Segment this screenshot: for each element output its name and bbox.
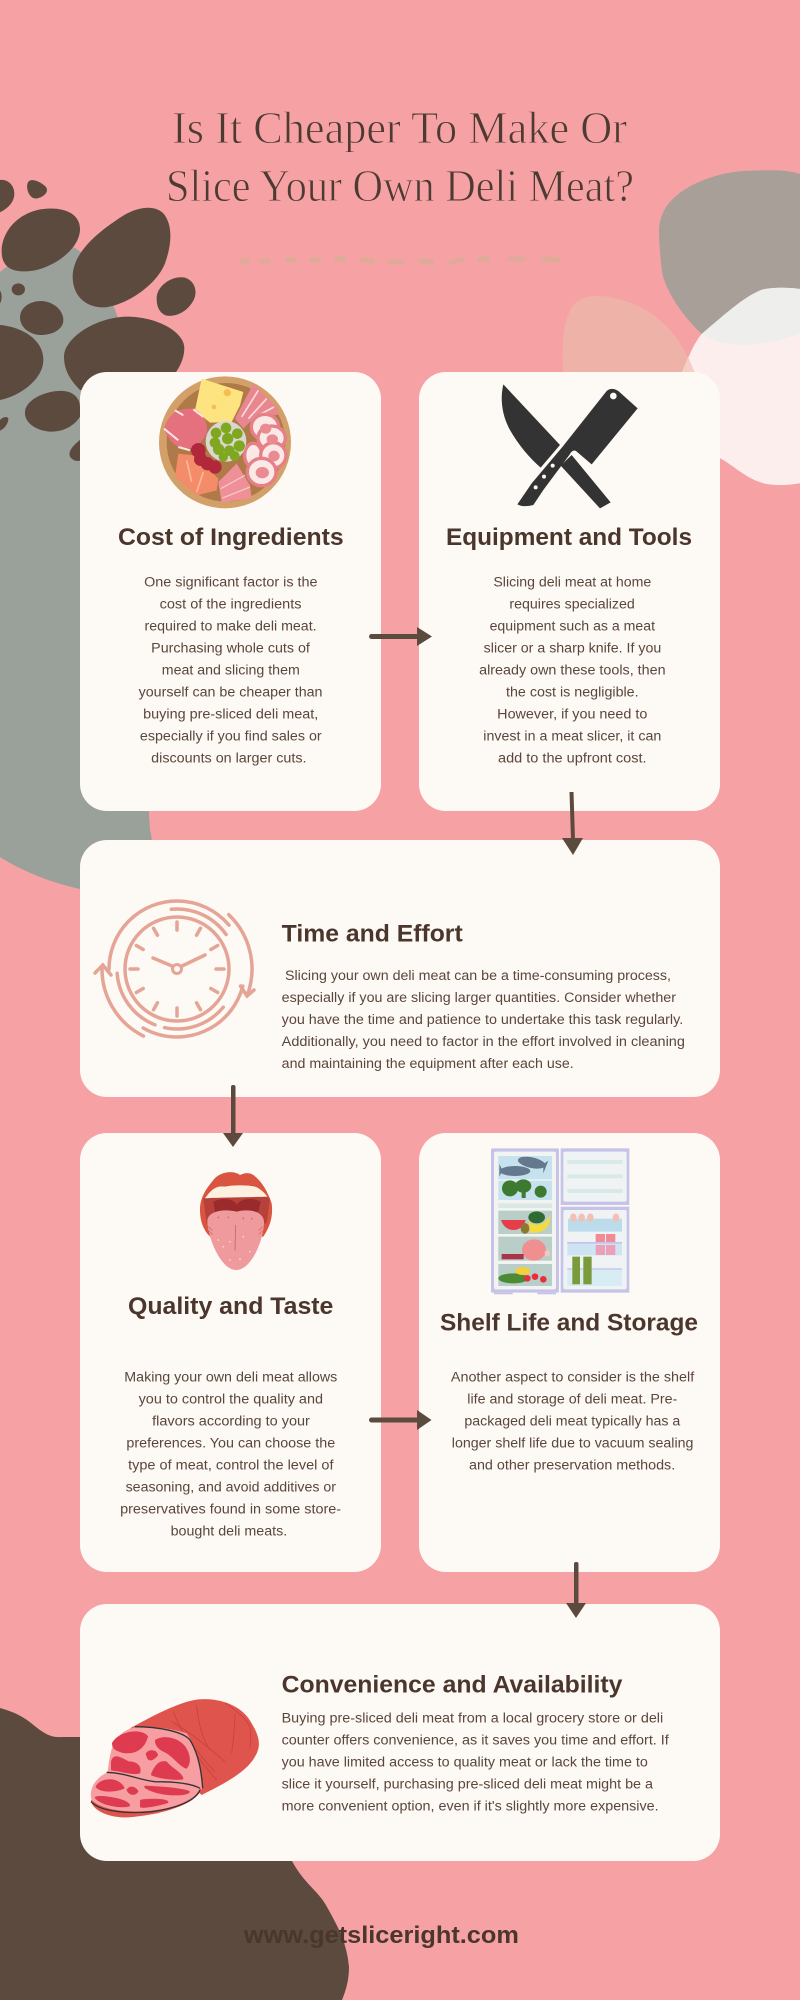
body text: Additionally, you need to factor in the effort involved in cleaning (282, 1034, 685, 1049)
heading: Convenience and Availability (282, 1672, 623, 1699)
panel: equipment and tools (419, 372, 720, 811)
body text: packaged deli meat typically has a (464, 1414, 681, 1429)
card background (419, 372, 720, 811)
footer url: www.getsliceright.com (243, 1922, 519, 1949)
body text: bought deli meats. (171, 1524, 287, 1539)
body text: and maintaining the equipment after each use. (282, 1056, 574, 1071)
body text: slicer or a sharp knife. If you (484, 641, 661, 656)
body text: especially if you are slicing larger quantities. Consider whether (282, 990, 677, 1005)
body text (479, 575, 666, 766)
card background (419, 1133, 720, 1572)
body text: more convenient option, even if it's slightly more expensive. (282, 1799, 659, 1814)
body text: preferences. You can choose the (126, 1436, 335, 1451)
body text: However, if you need to (497, 707, 647, 722)
body text: invest in a meat slicer, it can (483, 729, 661, 744)
icon: open fridge (491, 1148, 629, 1294)
dashed divider (242, 259, 558, 262)
decorative blobs: right cluster (563, 170, 800, 485)
body text (120, 1370, 341, 1539)
heading: Time and Effort (282, 921, 463, 948)
body text: Purchasing whole cuts of (151, 641, 310, 656)
decorative blob: bottom left (0, 1708, 349, 2000)
body text: yourself can be cheaper than (139, 685, 322, 700)
body text (282, 1711, 669, 1814)
card background (80, 372, 381, 811)
body text: Making your own deli meat allows (124, 1370, 338, 1385)
body text: already own these tools, then (479, 663, 666, 678)
body text: and other preservation methods. (469, 1458, 675, 1473)
body text: preservatives found in some store- (120, 1502, 341, 1517)
icon: mouth and tongue (200, 1172, 272, 1270)
body text: required to make deli meat. (144, 619, 317, 634)
icon: charcuterie plate (159, 376, 291, 508)
title (166, 102, 634, 211)
body text: Buying pre-sliced deli meat from a local grocery store or deli (282, 1711, 663, 1726)
body text: discounts on larger cuts. (151, 751, 306, 766)
body text: seasoning, and avoid additives or (126, 1480, 337, 1495)
title: Slice Your Own Deli Meat? (166, 160, 634, 211)
body text: especially if you find sales or (140, 729, 322, 744)
body text: Slicing deli meat at home (493, 575, 651, 590)
panel: time and effort (71, 840, 720, 1097)
panel: shelf life and storage (419, 1133, 720, 1572)
body text: buying pre-sliced deli meat, (143, 707, 318, 722)
body text: cost of the ingredients (160, 597, 302, 612)
body text: Another aspect to consider is the shelf (451, 1370, 694, 1385)
card background (80, 1133, 381, 1572)
body text (282, 968, 685, 1071)
body text: equipment such as a meat (490, 619, 655, 634)
body text: type of meat, control the level of (128, 1458, 334, 1473)
title: Is It Cheaper To Make Or (172, 102, 627, 153)
body text: longer shelf life due to vacuum sealing (452, 1436, 693, 1451)
decorative blobs: left cluster (0, 180, 196, 892)
body text: Slicing your own deli meat can be a time-consuming process, (285, 968, 671, 983)
card background (80, 1604, 720, 1861)
body text: counter offers convenience, as it saves you time and effort. If (282, 1733, 669, 1748)
body text: you to control the quality and (139, 1392, 323, 1407)
heading: Shelf Life and Storage (440, 1310, 698, 1337)
icon: clock (71, 863, 283, 1075)
body text: you have the time and patience to undertake this task regularly. (282, 1012, 683, 1027)
body text (139, 575, 322, 766)
body text: add to the upfront cost. (498, 751, 647, 766)
arrow: ingredients to equipment (369, 627, 432, 646)
decorative overlap of grey and white blobs (702, 288, 800, 346)
arrow: shelf life to convenience (566, 1562, 586, 1618)
panel: quality and taste (80, 1133, 381, 1572)
body text: you have limited access to quality meat or lack the time to (282, 1755, 648, 1770)
arrow: equipment to time (562, 792, 583, 855)
body text: meat and slicing them (162, 663, 300, 678)
arrow: quality to shelf life (369, 1410, 432, 1430)
body text: requires specialized (509, 597, 635, 612)
icon: crossed knives (502, 384, 638, 508)
body text: the cost is negligible. (506, 685, 639, 700)
arrow: time to quality (223, 1085, 243, 1147)
body text: life and storage of deli meat. Pre- (467, 1392, 677, 1407)
body text (451, 1370, 694, 1473)
body text: One significant factor is the (144, 575, 318, 590)
panel: convenience and availability (80, 1604, 720, 1861)
panel: cost of ingredients (80, 372, 381, 811)
body text: slice it yourself, purchasing pre-sliced deli meat might be a (282, 1777, 654, 1792)
heading: Equipment and Tools (446, 524, 692, 551)
heading: Cost of Ingredients (118, 524, 344, 551)
heading: Quality and Taste (128, 1293, 333, 1320)
icon: sliced ham (91, 1699, 259, 1817)
body text: flavors according to your (152, 1414, 310, 1429)
card background (80, 840, 720, 1097)
